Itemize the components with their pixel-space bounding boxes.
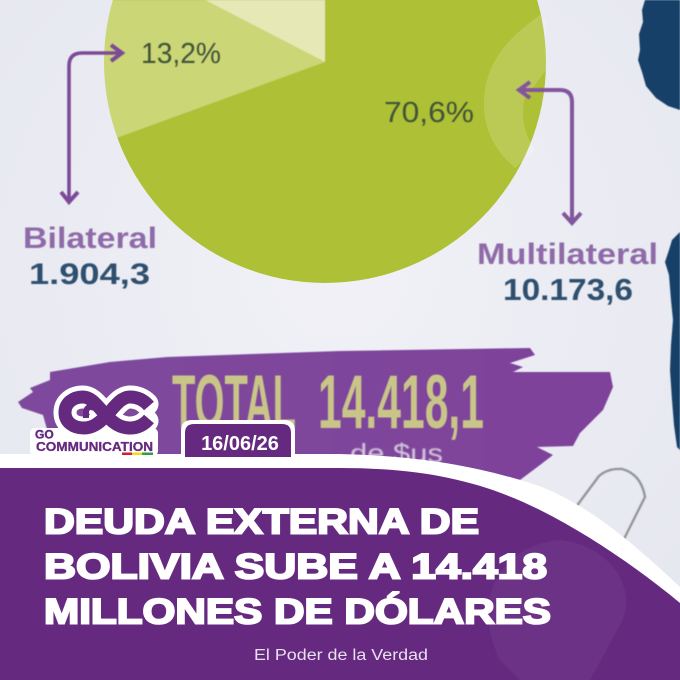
value: 10.173,6: 10.173,6	[503, 272, 633, 307]
torn navy background, top right	[638, 0, 680, 110]
paper clip	[573, 469, 645, 541]
watermark shape over pie	[484, 15, 546, 168]
pie chart	[100, 0, 550, 290]
white wave band	[0, 454, 680, 680]
date tab	[181, 420, 295, 457]
torn navy background, lower right	[665, 232, 680, 450]
date text: 16/06/26	[201, 433, 279, 455]
arrow: bilateral	[61, 45, 122, 202]
slice: multilateral	[100, 0, 550, 290]
headline: BOLIVIA SUBE A 14.418	[44, 546, 547, 586]
logo flag stripes	[122, 452, 153, 455]
total figure: 14.418,1	[318, 360, 484, 445]
pie percentage: 13,2%: 13,2%	[141, 38, 221, 70]
logo	[30, 397, 158, 456]
panel watermark	[488, 540, 626, 680]
logo text COMMUNICATION: COMMUNICATION	[36, 440, 153, 454]
headline: DEUDA EXTERNA DE	[44, 502, 479, 542]
label: Bilateral: Bilateral	[23, 222, 157, 255]
tagline: El Poder de la Verdad	[254, 647, 428, 664]
arrow: multilateral	[519, 82, 581, 223]
total unit: de $us	[350, 438, 443, 468]
label: Multilateral	[477, 238, 658, 307]
logo text GO: GO	[35, 428, 54, 442]
purple panel	[0, 468, 680, 680]
headline: MILLONES DE DÓLARES	[44, 592, 551, 632]
slice: other	[205, 0, 325, 62]
logo badge outline	[30, 428, 158, 456]
brush stroke	[18, 348, 613, 480]
label: Multilateral: Multilateral	[477, 238, 658, 271]
headline	[44, 502, 551, 632]
value: 1.904,3: 1.904,3	[29, 258, 150, 291]
slice: bilateral	[100, 0, 325, 144]
label: Bilateral	[23, 222, 157, 291]
logo halo	[65, 397, 147, 428]
pie percentage: 70,6%: 70,6%	[384, 97, 474, 129]
total figure: TOTAL	[172, 360, 296, 445]
logo mark	[65, 397, 149, 428]
